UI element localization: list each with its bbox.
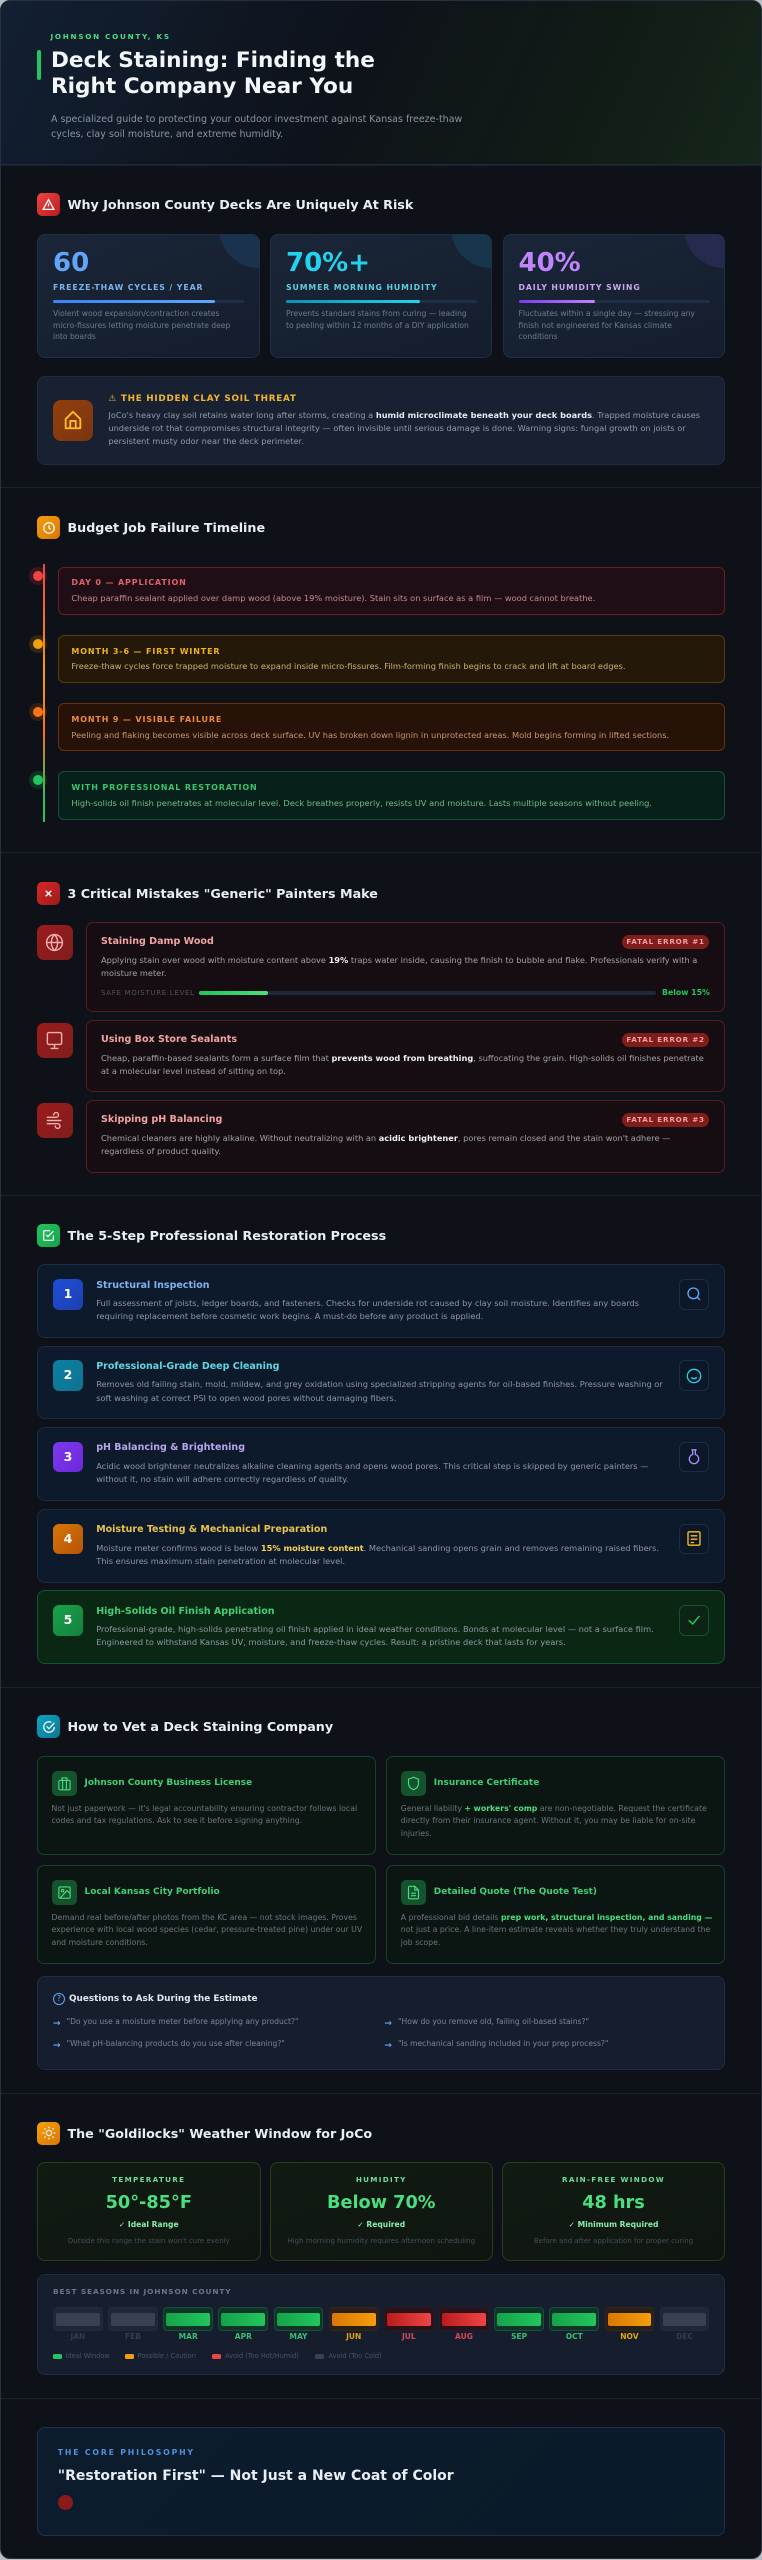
timeline card: day 0 (58, 567, 725, 615)
step text: Full assessment of joists, ledger boards, and fasteners. Checks for underside rot caused by clay soil moisture. Identifies any boards (96, 1298, 639, 1308)
callout heading: ⚠ THE HIDDEN CLAY SOIL THREAT (108, 394, 297, 404)
weather card: rain-free: RAIN-FREE WINDOW (562, 2175, 665, 2184)
icon: warning (37, 193, 60, 216)
section: core philosophy (0, 2398, 762, 2560)
step number (53, 1442, 83, 1472)
stat description: Fluctuates within a single day — stressing any (518, 309, 695, 318)
dot: month 3-6 (29, 635, 47, 653)
subtitle: A specialized guide to protecting your outdoor investment against Kansas freeze-thaw (51, 114, 462, 124)
icon: sun (37, 2122, 60, 2145)
subtitle (51, 114, 462, 140)
step number: 5 (64, 1612, 72, 1627)
progress bar (286, 300, 477, 302)
panel: best seasons calendar: Ideal Window (66, 2352, 110, 2360)
section: failure timeline (0, 487, 762, 853)
card text: A professional bid details prep work, structural inspection, and sanding — (401, 1913, 712, 1922)
dot: restoration (29, 771, 47, 789)
section: critical mistakes (0, 852, 762, 1195)
step title: pH Balancing & Brightening (96, 1442, 245, 1453)
badge: FATAL ERROR #1 (626, 937, 705, 946)
step 1 (37, 1264, 725, 1338)
stat description (53, 309, 230, 341)
stat description: conditions (518, 332, 558, 341)
card text: experience with local wood species (cedar, pressure-treated pine) under our UV (52, 1925, 362, 1934)
icon: cleaning (679, 1360, 709, 1391)
mistake text: at a molecular level instead of sitting on top. (101, 1066, 286, 1076)
mistake title: Using Box Store Sealants (101, 1034, 237, 1045)
mistake text: moisture meter. (101, 968, 166, 978)
value: 50°-85°F (106, 2193, 192, 2213)
title: Right Company Near You (51, 74, 353, 98)
step text: Engineered to withstand Kansas UV, moisture, and freeze-thaw cycles. Result: a pristine deck that lasts for years. (96, 1637, 566, 1647)
callout text: JoCo's heavy clay soil retains water long after storms, creating a humid microclimate beneath your deck boards. Trapped moisture causes (108, 410, 700, 420)
stat description: to peeling within 12 months of a DIY application (286, 321, 469, 330)
card text: Peeling and flaking becomes visible across deck surface. UV has broken down lignin in unprotected areas. Mold begins forming in lifted sections. (71, 730, 669, 740)
mistake text: Cheap, paraffin-based sealants form a surface film that prevents wood from breathing, suffocating the grain. High-solids oil finishes penetrate (101, 1053, 704, 1063)
step 2 (37, 1346, 725, 1419)
stat description: finish not engineered for Kansas climate (518, 321, 672, 330)
step text: Acidic wood brightener neutralizes alkaline cleaning agents and opens wood pores. This critical step is skipped by generic painters — (96, 1461, 648, 1471)
icon: check square (37, 1224, 60, 1247)
icon: clock (37, 516, 60, 539)
badge (622, 1113, 709, 1127)
panel: best seasons calendar: Possible / Caution (138, 2352, 196, 2360)
accent bar (37, 50, 41, 80)
icon: question: ? (57, 1994, 61, 2003)
eyebrow: JOHNSON COUNTY, KS (50, 32, 171, 41)
step text (96, 1461, 648, 1484)
panel: questions to ask (37, 1976, 725, 2070)
question 4: → (384, 2041, 392, 2051)
weather card: humidity: ✓ Required (357, 2220, 405, 2229)
hero header (0, 0, 762, 165)
step number: 2 (64, 1367, 72, 1382)
mistake title: Staining Damp Wood (101, 936, 214, 947)
legend (53, 2354, 62, 2359)
badge (622, 935, 709, 949)
mistake text: Chemical cleaners are highly alkaline. Without neutralizing with an acidic brightener, pores remain closed and the stain won't adhere — (101, 1133, 670, 1143)
step text: without it, no stain will adhere correctly regardless of quality. (96, 1474, 349, 1484)
step title: Structural Inspection (96, 1280, 210, 1291)
step title: Professional-Grade Deep Cleaning (96, 1361, 279, 1372)
panel: questions to ask: "How do you remove old, failing oil-based stains?" (398, 2017, 589, 2026)
icon: wind (37, 1103, 72, 1138)
card text: job scope. (401, 1938, 440, 1947)
callout: clay soil threat (37, 376, 725, 465)
stat description (518, 309, 695, 341)
red dot (58, 2495, 73, 2510)
step title: High-Solids Oil Finish Application (96, 1606, 275, 1617)
stat description: into boards (53, 332, 96, 341)
calendar title: BEST SEASONS IN JOHNSON COUNTY (53, 2287, 231, 2296)
step number: 3 (64, 1449, 72, 1464)
timeline card: month 3-6 (58, 635, 725, 683)
card text: and moisture conditions. (52, 1938, 148, 1947)
weather card: humidity: HUMIDITY (356, 2175, 407, 2184)
card text: Not just paperwork — it's legal accountability ensuring contractor follows local (52, 1804, 357, 1813)
weather card: rain-free (502, 2162, 725, 2261)
mistake card 1 (86, 922, 725, 1012)
panel: best seasons calendar: AUG (455, 2332, 473, 2341)
panel: best seasons calendar: SEP (511, 2332, 527, 2341)
panel: best seasons calendar: NOV (620, 2332, 639, 2341)
heading text: Why Johnson County Decks Are Uniquely At Risk (68, 197, 413, 212)
section: 5-step process (0, 1195, 762, 1687)
timeline card: restoration (58, 771, 725, 820)
question 2: → (384, 2019, 392, 2029)
dot: day 0 (29, 567, 47, 585)
progress bar (518, 300, 710, 302)
stat description: Violent wood expansion/contraction creates (53, 309, 220, 318)
card text: directly from their insurance agent. Without it, you may be liable for on-site (401, 1816, 695, 1825)
value: 48 hrs (582, 2193, 645, 2213)
icon: shield (401, 1771, 426, 1796)
heading text: Budget Job Failure Timeline (68, 520, 265, 535)
subtitle: cycles, clay soil moisture, and extreme humidity. (51, 128, 283, 140)
headline: "Restoration First" — Not Just a New Coat of Color (58, 2468, 454, 2484)
panel: best seasons calendar: JUN (346, 2332, 361, 2341)
stat value: 40% (518, 248, 581, 278)
icon: file (401, 1880, 426, 1905)
card text: High-solids oil finish penetrates at molecular level. Deck breathes properly, resists UV and moisture. Lasts multiple seasons without peeling. (71, 798, 652, 808)
panel: best seasons calendar (37, 2274, 725, 2375)
callout text: underside rot that compromises structural integrity — often invisible until serious damage is done. Warning signs: fungal growth on joists or (108, 423, 686, 433)
card title: Insurance Certificate (434, 1778, 539, 1788)
card heading: DAY 0 — APPLICATION (71, 578, 187, 587)
panel: best seasons calendar: MAY (290, 2332, 307, 2341)
stat label: DAILY HUMIDITY SWING (518, 283, 641, 292)
step 3 (37, 1427, 725, 1501)
icon: check (679, 1605, 709, 1636)
icon: note (679, 1524, 709, 1554)
progress bar (53, 300, 244, 302)
stat label: SUMMER MORNING HUMIDITY (286, 283, 438, 292)
stat label: FREEZE-THAW CYCLES / YEAR (53, 283, 203, 292)
timeline line (43, 564, 45, 822)
dot: month 9 (29, 703, 47, 721)
moisture bar (199, 991, 656, 995)
card text: injuries. (401, 1829, 432, 1838)
icon: search (679, 1279, 709, 1310)
stat description (286, 309, 469, 330)
mistake text: regardless of product quality. (101, 1146, 221, 1156)
section: vet a company (0, 1687, 762, 2093)
question 3: → (53, 2041, 61, 2051)
card text (400, 1913, 712, 1947)
callout text (108, 410, 700, 446)
heading text: How to Vet a Deck Staining Company (68, 1719, 333, 1734)
card title: Detailed Quote (The Quote Test) (434, 1887, 597, 1897)
panel: best seasons calendar: Avoid (Too Cold) (328, 2352, 382, 2360)
step text: Professional-grade, high-solids penetrating oil finish applied in ideal weather conditions. Bonds at molecular level — not a surface film. (96, 1624, 654, 1634)
step number (53, 1524, 83, 1554)
section: weather window (0, 2093, 762, 2398)
heading text: The "Goldilocks" Weather Window for JoCo (68, 2126, 372, 2141)
step number (53, 1360, 83, 1391)
step text: soft washing at correct PSI to open wood pores without damaging fibers. (96, 1393, 396, 1403)
weather card: humidity: High morning humidity requires afternoon scheduling (287, 2237, 475, 2245)
stat card: humidity swing (502, 234, 725, 358)
step number: 4 (64, 1531, 72, 1546)
icon: check circle (37, 1715, 60, 1738)
value: Below 70% (327, 2193, 436, 2213)
panel: best seasons calendar: FEB (125, 2332, 141, 2341)
panel: best seasons calendar: Avoid (Too Hot/Humid) (225, 2352, 299, 2360)
title (51, 48, 375, 98)
section heading (37, 1224, 386, 1247)
icon: briefcase (52, 1771, 76, 1796)
panel: best seasons calendar: APR (235, 2332, 252, 2341)
section heading (37, 882, 378, 905)
panel: questions to ask: "Is mechanical sanding included in your prep process?" (398, 2039, 608, 2048)
icon: house (53, 400, 93, 440)
step text: requiring replacement before cosmetic work begins. A must-do before any product is applied. (96, 1311, 483, 1321)
weather card: temperature: TEMPERATURE (112, 2175, 185, 2184)
weather card: temperature: ✓ Ideal Range (119, 2220, 179, 2229)
badge: FATAL ERROR #2 (626, 1035, 705, 1044)
callout text: persistent musty odor near the deck perimeter. (108, 436, 304, 446)
card text: not just a price. A line-item estimate reveals whether they truly understand the (401, 1925, 710, 1934)
heading text: The 5-Step Professional Restoration Process (68, 1228, 386, 1243)
vet card: insurance (386, 1756, 725, 1855)
icon: monitor (37, 1023, 72, 1058)
badge: FATAL ERROR #3 (626, 1115, 705, 1124)
panel: questions to ask: "Do you use a moisture meter before applying any product?" (67, 2017, 298, 2026)
weather card: rain-free: ✓ Minimum Required (569, 2220, 658, 2229)
stat card: freeze-thaw (37, 234, 260, 358)
heading text: 3 Critical Mistakes "Generic" Painters Make (68, 886, 378, 901)
card title: Local Kansas City Portfolio (84, 1887, 220, 1897)
section: why at risk (0, 165, 762, 487)
weather card: temperature (37, 2162, 260, 2261)
section heading (37, 516, 265, 539)
step number: 1 (64, 1286, 72, 1301)
moisture label: SAFE MOISTURE LEVEL (101, 989, 195, 997)
card text: Freeze-thaw cycles force trapped moisture to expand inside micro-fissures. Film-forming finish begins to crack and lift at board edges. (71, 661, 625, 671)
step text (96, 1543, 659, 1566)
card text (401, 1804, 707, 1838)
step 4 (37, 1509, 725, 1583)
timeline card: month 9 (58, 703, 725, 751)
panel: best seasons calendar: MAR (179, 2332, 198, 2341)
mistake text (101, 955, 697, 978)
card heading: MONTH 9 — VISIBLE FAILURE (71, 715, 222, 724)
weather card: temperature: Outside this range the stain won't cure evenly (68, 2237, 230, 2245)
step text: Removes old failing stain, mold, mildew, and grey oxidation using specialized stripping agents for oil-based finishes. Pressure washing or (96, 1379, 663, 1389)
card heading: WITH PROFESSIONAL RESTORATION (71, 783, 258, 792)
weather card: humidity (270, 2162, 492, 2261)
icon: image (52, 1880, 76, 1905)
step number (53, 1279, 83, 1310)
stat value: 70%+ (286, 248, 370, 278)
step text (96, 1379, 663, 1403)
stat description: micro-fissures letting moisture penetrate deep (53, 321, 230, 330)
panel: best seasons calendar: JUL (402, 2332, 416, 2341)
stat card: humidity (270, 234, 492, 358)
icon: globe (37, 925, 72, 960)
vet card: portfolio (37, 1865, 376, 1964)
panel title: Questions to Ask During the Estimate (69, 1994, 257, 2004)
card text: General liability + workers' comp are non-negotiable. Request the certificate (401, 1804, 707, 1813)
stat description: Prevents standard stains from curing — leading (286, 309, 467, 318)
stat value: 60 (53, 248, 89, 278)
mistake card 3 (86, 1100, 725, 1173)
card text: Cheap paraffin sealant applied over damp wood (above 19% moisture). Stain sits on surface as a film — wood cannot breathe. (71, 593, 595, 603)
mistake text (101, 1053, 704, 1076)
moisture value: Below 15% (662, 988, 710, 997)
title: Deck Staining: Finding the (51, 48, 375, 72)
month cells (53, 2307, 103, 2331)
step text: Moisture meter confirms wood is below 15% moisture content. Mechanical sanding opens grain and removes remaining raised fibers. (96, 1543, 659, 1553)
mistake text: Applying stain over wood with moisture content above 19% traps water inside, causing the finish to bubble and flake. Professionals verify with a (101, 955, 697, 965)
vet card: quote (386, 1865, 725, 1964)
panel: best seasons calendar: JAN (70, 2332, 85, 2341)
panel: questions to ask: "What pH-balancing products do you use after cleaning?" (67, 2039, 285, 2048)
icon: x (37, 882, 60, 905)
philosophy card (37, 2427, 725, 2536)
section heading (37, 1715, 333, 1738)
step text (96, 1624, 654, 1647)
panel: best seasons calendar: DEC (676, 2332, 693, 2341)
step text: This ensures maximum stain penetration at molecular level. (96, 1556, 345, 1566)
card text: Demand real before/after photos from the KC area — not stock images. Proves (52, 1913, 357, 1922)
eyebrow: THE CORE PHILOSOPHY (58, 2448, 195, 2457)
weather card: rain-free: Before and after application for proper curing (534, 2237, 693, 2245)
section heading (37, 193, 414, 216)
card text: codes and tax regulations. Ask to see it before signing anything. (52, 1816, 302, 1825)
mistake text (101, 1133, 670, 1156)
step number (53, 1605, 83, 1636)
mistake card 2 (86, 1020, 725, 1092)
panel: best seasons calendar: OCT (566, 2332, 583, 2341)
question 1: → (53, 2019, 61, 2029)
step text (96, 1298, 639, 1321)
card title: Johnson County Business License (84, 1778, 252, 1788)
section heading (37, 2122, 372, 2145)
icon: question (53, 1993, 65, 2005)
card heading: MONTH 3-6 — FIRST WINTER (71, 647, 220, 656)
badge (622, 1033, 709, 1047)
icon: flask (679, 1442, 709, 1472)
card text (52, 1804, 357, 1825)
step 5 (37, 1590, 725, 1664)
mistake title: Skipping pH Balancing (101, 1114, 222, 1125)
vet card: license (37, 1756, 376, 1855)
card text (52, 1913, 362, 1947)
step title: Moisture Testing & Mechanical Preparation (96, 1524, 327, 1535)
